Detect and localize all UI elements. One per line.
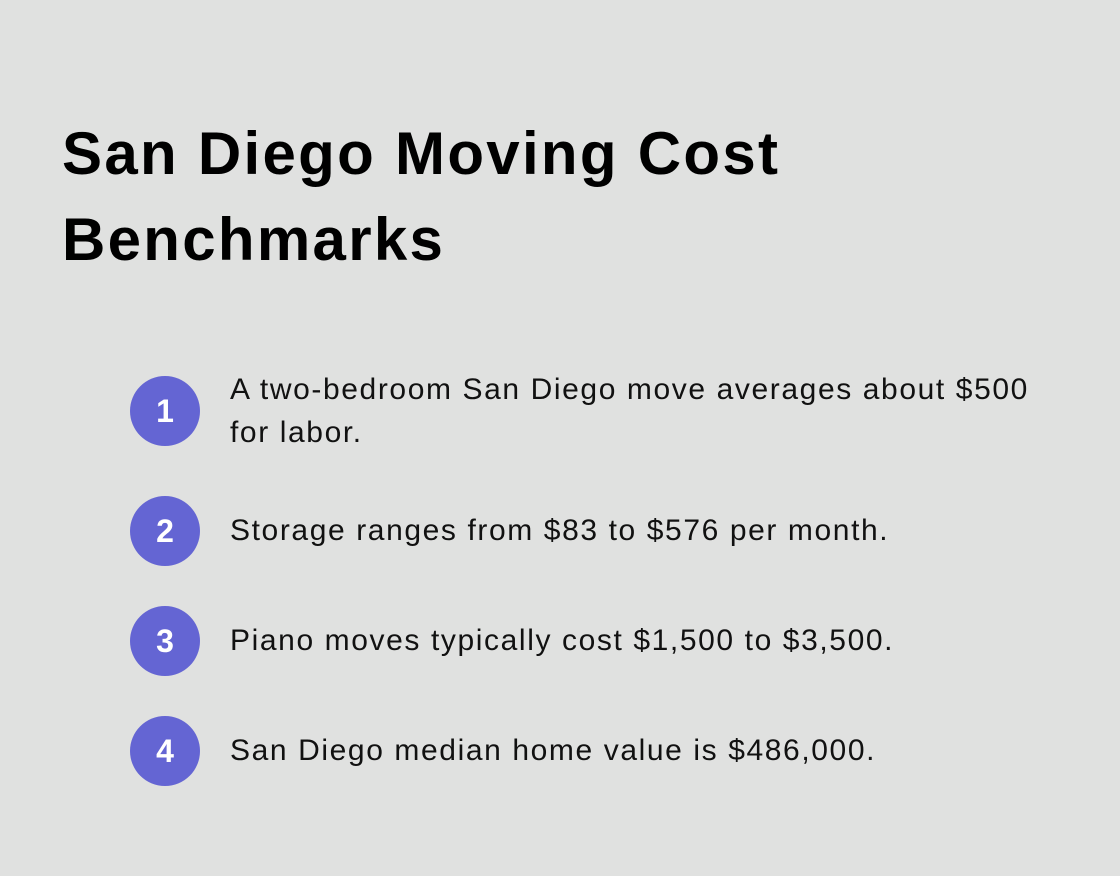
badge 3 xyxy=(130,606,200,676)
badge 2: 2 xyxy=(156,513,174,549)
item 3 xyxy=(130,606,894,676)
text 1: for labor. xyxy=(230,416,363,449)
badge 1: 1 xyxy=(156,393,174,429)
text 4: San Diego median home value is $486,000. xyxy=(230,734,876,767)
text 3: Piano moves typically cost $1,500 to $3,500. xyxy=(230,624,894,657)
badge 4: 4 xyxy=(156,733,174,769)
title: San Diego Moving Cost xyxy=(62,120,780,187)
text 1 xyxy=(230,373,1029,449)
badge 3: 3 xyxy=(156,623,174,659)
title xyxy=(62,120,780,273)
badge 1 xyxy=(130,376,200,446)
item 4 xyxy=(130,716,876,786)
item 1 xyxy=(130,373,1029,449)
text 1: A two-bedroom San Diego move averages about $500 xyxy=(230,373,1029,406)
title: Benchmarks xyxy=(62,206,445,273)
item 2 xyxy=(130,496,889,566)
badge 4 xyxy=(130,716,200,786)
badge 2 xyxy=(130,496,200,566)
text 2: Storage ranges from $83 to $576 per month. xyxy=(230,514,889,547)
